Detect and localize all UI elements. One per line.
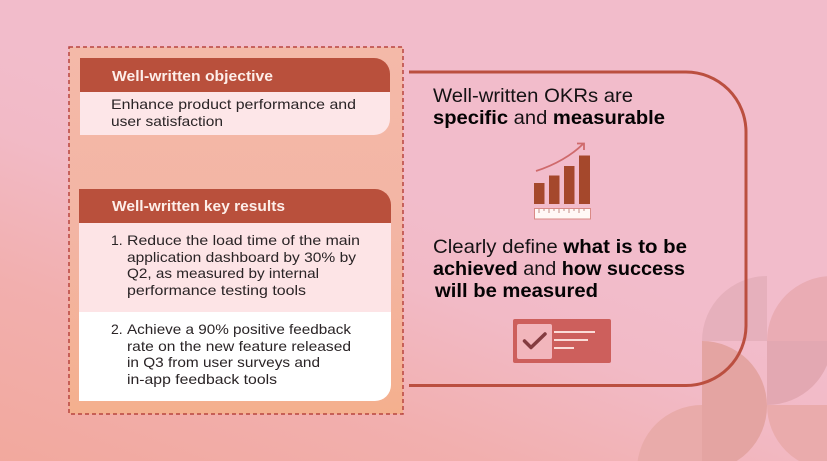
heading: specific and measurable: Well-written OKRs are	[433, 85, 633, 107]
objective text: Enhance product performance and	[111, 96, 356, 112]
heading: specific and measurable: specific and measurable	[433, 107, 665, 129]
icon: bar chart with ruler	[534, 144, 590, 219]
text: clearly define: Clearly define what is to be	[433, 236, 687, 258]
key result 1: 1.	[111, 232, 123, 248]
heading: specific and measurable	[433, 85, 665, 129]
key result 1: Reduce the load time of the main	[127, 232, 360, 248]
heading: well-written objective: Well-written objective	[112, 69, 273, 85]
connector bracket	[409, 72, 746, 386]
text: clearly define	[433, 236, 687, 302]
objective text: user satisfaction	[111, 113, 223, 129]
key result 1: performance testing tools	[127, 282, 306, 298]
objective text	[111, 96, 356, 129]
decorative geometric shapes	[637, 276, 827, 461]
key result 2	[111, 321, 352, 387]
key result 2: Achieve a 90% positive feedback	[127, 321, 352, 337]
text: clearly define: achieved and how success	[433, 258, 685, 280]
key result 2: in Q3 from user surveys and	[127, 354, 320, 370]
key result 1: application dashboard by 30% by	[127, 249, 356, 265]
panel: well-written examples	[69, 47, 403, 414]
card: well-written key results	[79, 189, 391, 401]
text: clearly define: will be measured	[434, 280, 598, 302]
key result 1	[111, 232, 360, 298]
key result 2: 2.	[111, 321, 123, 337]
key result 2: rate on the new feature released	[127, 338, 351, 354]
key result 1: Q2, as measured by internal	[127, 265, 319, 281]
heading: well-written key results: Well-written key results	[112, 199, 285, 215]
card: well-written objective	[80, 58, 390, 135]
icon: checklist card	[513, 319, 611, 363]
key result 2: in-app feedback tools	[127, 371, 277, 387]
